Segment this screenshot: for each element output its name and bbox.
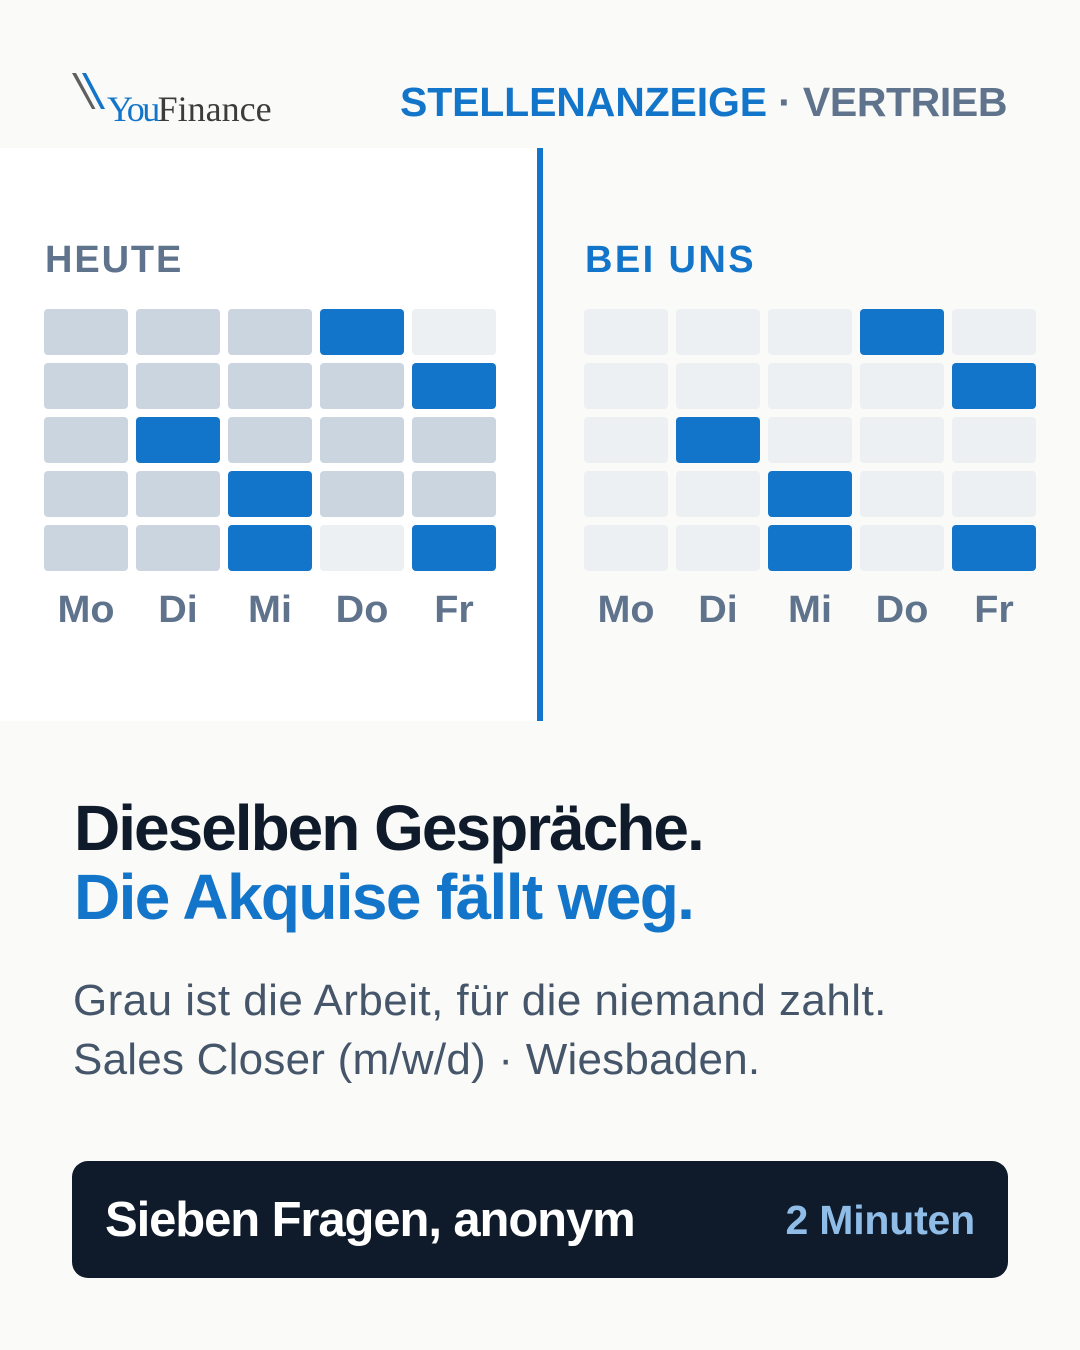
headline	[74, 792, 703, 933]
day labels: heute: Mo	[57, 589, 115, 631]
button duration: 2 Minuten	[785, 1197, 975, 1243]
icon: logo slashes	[72, 73, 105, 109]
chart: bei uns week grid	[584, 309, 1036, 571]
day labels: heute: Mi	[248, 589, 292, 631]
day labels: bei uns: Do	[876, 589, 928, 631]
body text: Sales Closer (m/w/d) · Wiesbaden.	[73, 1035, 760, 1084]
divider	[537, 148, 543, 721]
button label: Sieben Fragen, anonym	[105, 1193, 635, 1247]
day labels: heute: Di	[158, 589, 198, 631]
chart: heute week grid	[44, 309, 496, 571]
day labels: bei uns: Mo	[597, 589, 655, 631]
headline: Die Akquise fällt weg.	[74, 861, 693, 933]
day labels: bei uns: Mi	[788, 589, 832, 631]
day labels: bei uns	[597, 589, 1014, 631]
heading: heute: HEUTE	[45, 239, 183, 281]
body text: Grau ist die Arbeit, für die niemand zahlt.	[73, 976, 887, 1025]
day labels: heute: Do	[336, 589, 388, 631]
call to action button	[72, 1161, 1008, 1278]
panel: heute background	[0, 148, 537, 721]
day labels: bei uns: Fr	[974, 589, 1014, 631]
header label: STELLENANZEIGE · VERTRIEB	[400, 79, 1007, 125]
day labels: heute	[57, 589, 474, 631]
logo wordmark: YouFinance	[107, 89, 272, 129]
body text	[73, 976, 887, 1084]
headline: Dieselben Gespräche.	[74, 792, 703, 864]
heading: bei uns: BEI UNS	[585, 239, 756, 281]
day labels: heute: Fr	[434, 589, 474, 631]
logo: YouFinance	[72, 73, 272, 129]
day labels: bei uns: Di	[698, 589, 738, 631]
